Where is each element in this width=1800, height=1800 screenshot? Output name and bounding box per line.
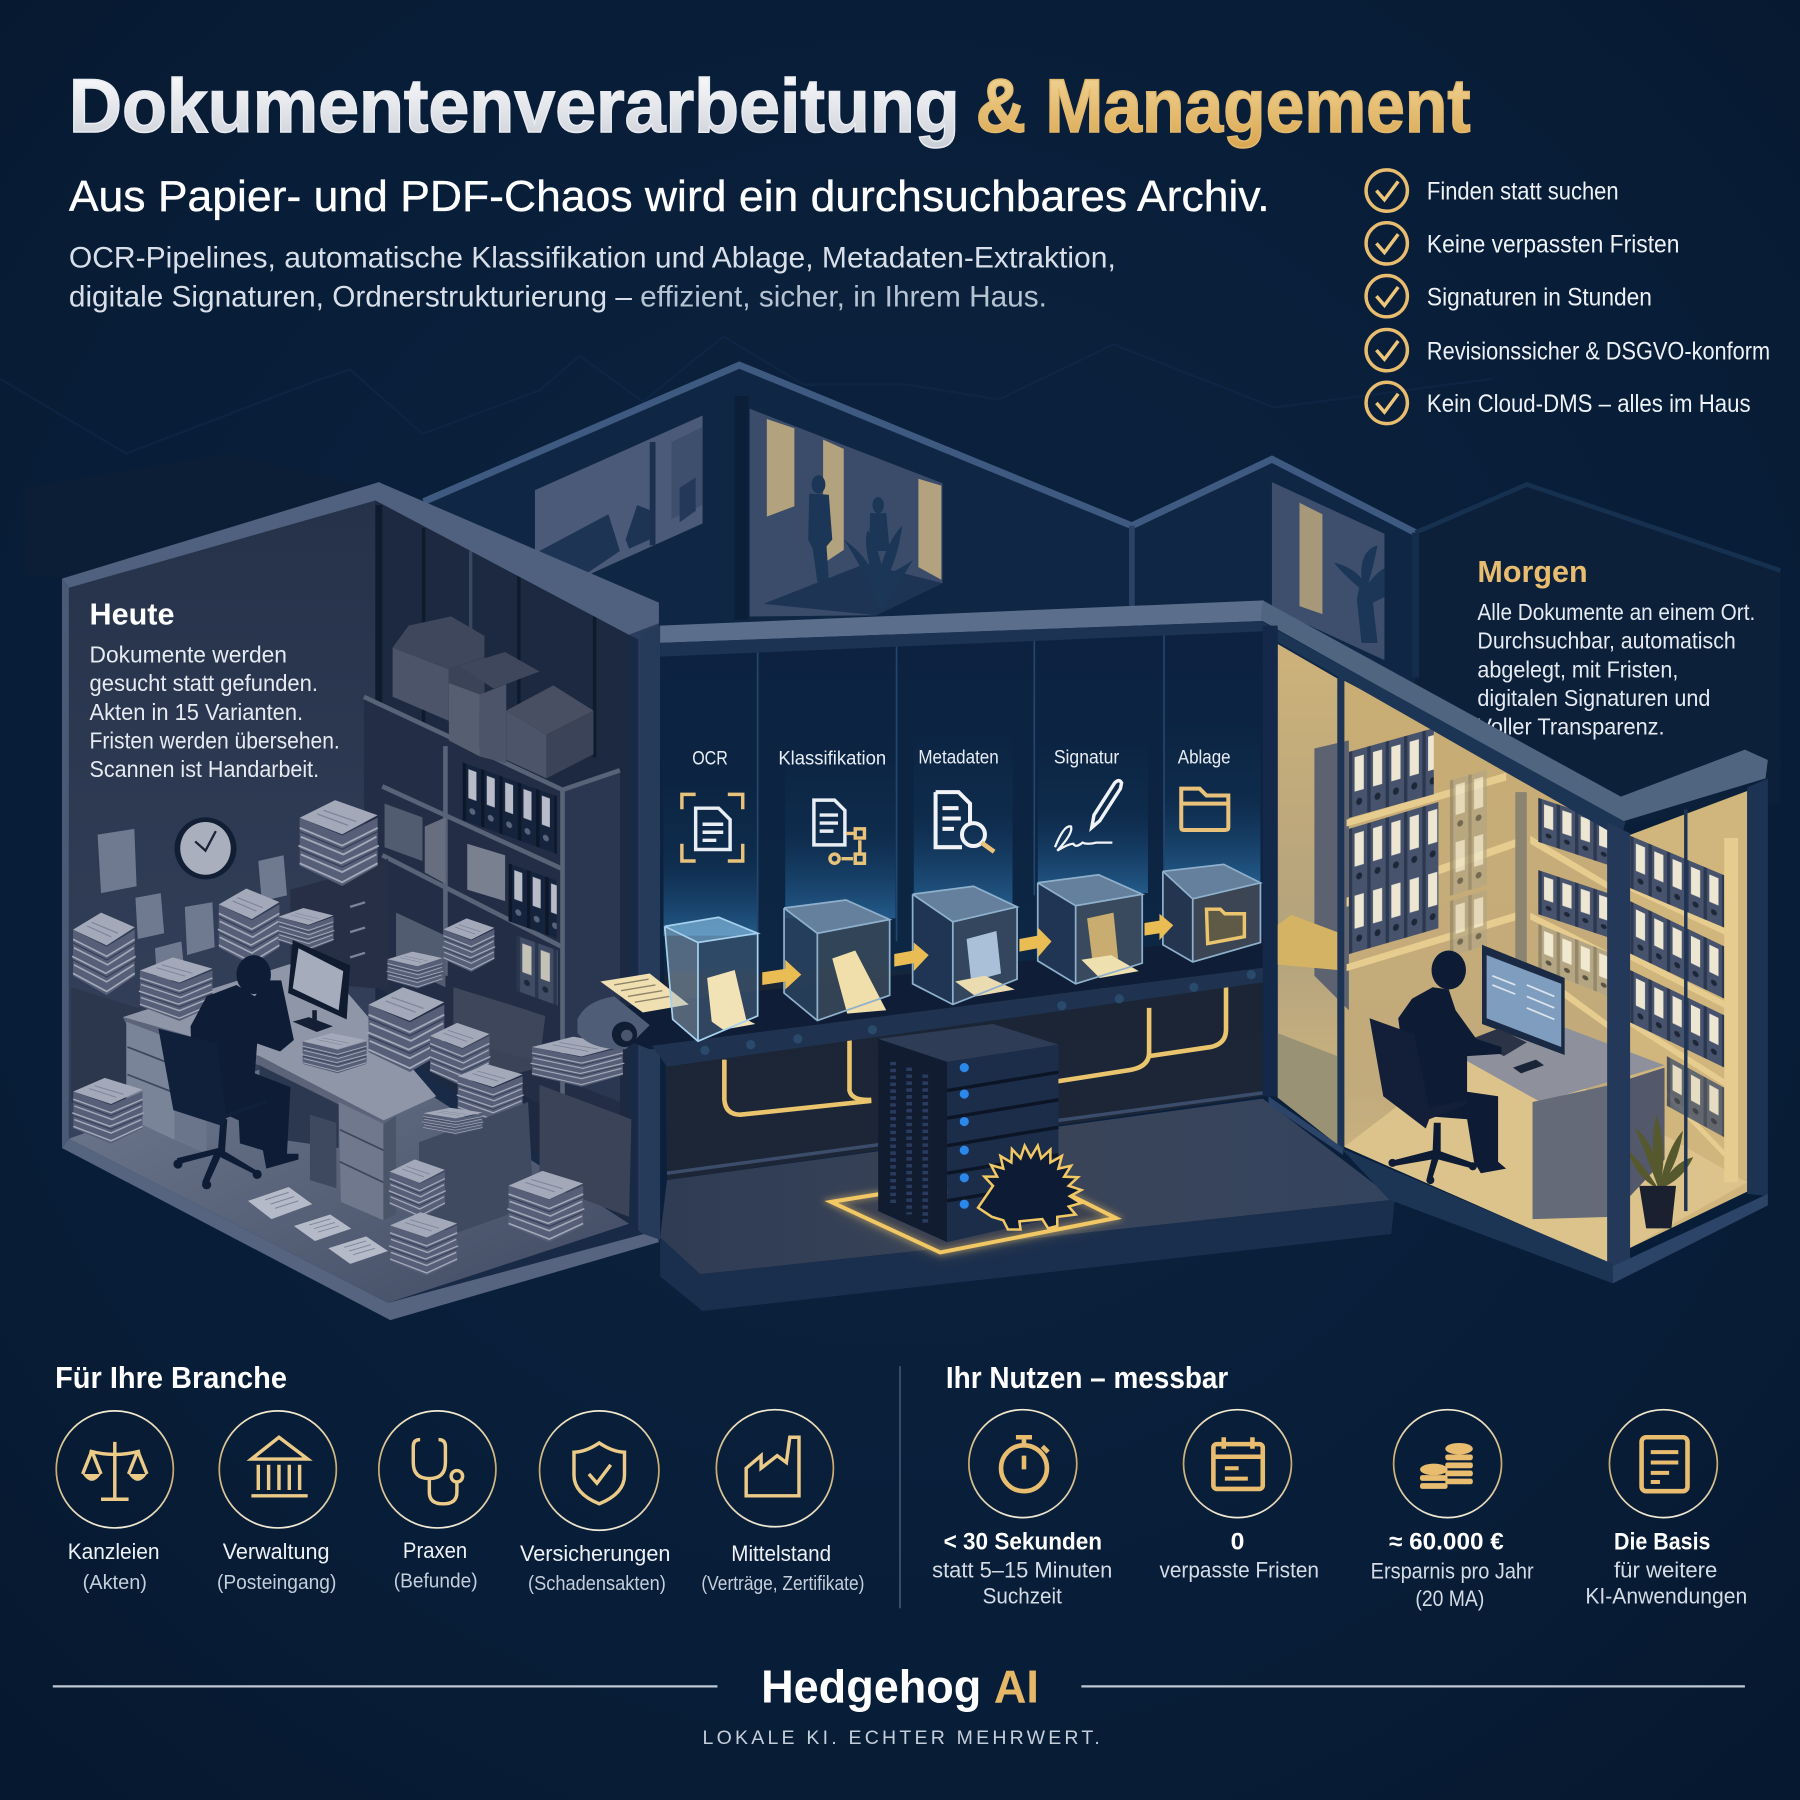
icon: folder: [1181, 789, 1228, 830]
icon: signature pen: [1055, 781, 1122, 851]
benefit: savings: (20 MA): [1415, 1586, 1484, 1611]
Heute text: Heute: [90, 596, 174, 631]
upper left window: [535, 416, 703, 580]
benefit: time: Suchzeit: [983, 1584, 1062, 1609]
floor: [660, 1099, 1395, 1274]
upper right window with plant: [1272, 482, 1384, 660]
wall bench: [71, 987, 149, 1119]
Heute text: [90, 596, 340, 782]
paper stacks: [72, 800, 631, 1276]
industry: Mittelstand: Mittelstand: [731, 1541, 831, 1566]
description: [69, 241, 1116, 314]
step labels: Ablage: [1178, 746, 1231, 768]
left room: Heute: [62, 482, 659, 1320]
yellow floor square: [831, 1192, 1116, 1252]
plant: [1628, 1115, 1693, 1228]
panel: Für Ihre Branche: Für Ihre Branche: [55, 1360, 287, 1395]
benefit checklist: Signaturen in Stunden: [1427, 283, 1652, 311]
benefit: savings: Ersparnis pro Jahr: [1371, 1558, 1534, 1583]
shelf with boxes and binders: [364, 616, 620, 1148]
middle room: pipeline: [577, 600, 1395, 1311]
incoming paper: [600, 973, 689, 1012]
benefit: foundation: KI-Anwendungen: [1585, 1584, 1747, 1609]
step labels: Klassifikation: [778, 748, 886, 770]
industry: Verwaltung: [217, 1411, 336, 1594]
Morgen text: Durchsuchbar, automatisch: [1477, 628, 1736, 654]
right room: Morgen: [1260, 600, 1768, 1283]
background skyline: [0, 336, 1492, 453]
industry: Versicherungen: [520, 1411, 670, 1595]
Morgen text: Morgen: [1477, 554, 1588, 589]
Morgen text: Voller Transparenz.: [1477, 714, 1665, 740]
benefit: foundation: Die Basis: [1614, 1529, 1710, 1556]
Morgen text: abgelegt, mit Fristen,: [1477, 656, 1678, 682]
file cabinet: [290, 859, 388, 990]
industry: Praxen: (Befunde): [394, 1570, 478, 1593]
benefit checklist: [1366, 170, 1770, 424]
icon: OCR: [682, 794, 743, 861]
benefit: deadlines: 0: [1231, 1529, 1244, 1556]
process box: classification: [784, 900, 890, 1021]
benefit: savings: [1371, 1410, 1534, 1611]
title: Dokumentenverarbeitung: [69, 64, 960, 149]
upper floor building: [23, 365, 1780, 827]
conveyor belt: [577, 932, 1326, 1066]
industry: Praxen: Praxen: [403, 1538, 467, 1563]
Heute text: Fristen werden übersehen.: [90, 727, 340, 753]
panel: Ihr Nutzen: [932, 1360, 1747, 1611]
Morgen text: [1477, 554, 1755, 740]
monitor: [288, 940, 350, 1032]
benefit: savings: ≈ 60.000 €: [1389, 1529, 1504, 1556]
title: & Management: [976, 64, 1471, 149]
loose sheets: [248, 1187, 388, 1264]
monitor: [1472, 945, 1565, 1073]
step labels: OCR: [692, 748, 728, 770]
icon: classification: [814, 800, 864, 863]
footer brand: [53, 1660, 1745, 1749]
desk: [1460, 1024, 1665, 1219]
boxes on shelf: [393, 616, 593, 778]
frame and mullions: [1260, 600, 1768, 1283]
upper centre window with silhouettes: [750, 409, 942, 616]
Heute text: gesucht statt gefunden.: [90, 670, 318, 696]
Morgen text: Alle Dokumente an einem Ort.: [1477, 599, 1755, 625]
title: [69, 64, 1471, 149]
desk: [123, 964, 436, 1220]
benefit: deadlines: [1159, 1410, 1319, 1582]
hedgehog logo: [978, 1146, 1081, 1229]
server rack: [878, 1024, 1058, 1242]
process box: metadata: [913, 886, 1017, 1004]
silhouette people: [808, 475, 913, 608]
benefit: foundation: [1585, 1410, 1747, 1609]
panel: Ihr Nutzen: Ihr Nutzen – messbar: [946, 1360, 1228, 1395]
Heute text: Scannen ist Handarbeit.: [90, 756, 319, 782]
data pipes: [724, 982, 1226, 1115]
benefit checklist: Keine verpassten Fristen: [1427, 231, 1679, 259]
process box: OCR: [665, 917, 758, 1041]
industry: Versicherungen: (Schadensakten): [528, 1572, 666, 1595]
industry: Praxen: [379, 1411, 496, 1593]
step labels: Metadaten: [918, 746, 999, 768]
Morgen text: digitalen Signaturen und: [1477, 685, 1710, 711]
process box: signature: [1038, 875, 1142, 984]
step labels: Signatur: [1054, 746, 1120, 768]
industry: Mittelstand: (Verträge, Zertifikate): [701, 1572, 864, 1595]
panel: Für Ihre Branche: [55, 1360, 864, 1595]
benefit checklist: Finden statt suchen: [1427, 178, 1619, 206]
benefit: time: statt 5–15 Minuten: [932, 1557, 1112, 1582]
icon: metadata search: [936, 792, 994, 852]
stressed worker silhouette: [158, 955, 298, 1189]
flow arrows: [762, 914, 1173, 990]
industry: Verwaltung: Verwaltung: [223, 1539, 329, 1564]
benefit: time: < 30 Sekunden: [944, 1529, 1102, 1556]
conveyor exit: [1263, 915, 1337, 970]
benefit: time: [932, 1410, 1112, 1609]
step labels: [692, 746, 1231, 770]
industry: Mittelstand: [701, 1410, 864, 1595]
industry: Kanzleien: [56, 1411, 173, 1594]
worker silhouette: [1370, 951, 1506, 1184]
glow columns: [664, 712, 1260, 936]
industry: Kanzleien: (Akten): [83, 1571, 147, 1594]
description: digitale Signaturen, Ordnerstrukturierung – effizient, sicher, in Ihrem Haus.: [69, 281, 1047, 314]
glass walls: [1278, 644, 1747, 1264]
pinned notes: [98, 829, 287, 985]
industry: Verwaltung: (Posteingang): [217, 1571, 336, 1594]
process box: filing: [1163, 864, 1260, 962]
industry: Versicherungen: Versicherungen: [520, 1541, 670, 1566]
room shell: [62, 482, 659, 1320]
benefit: deadlines: verpasste Fristen: [1159, 1557, 1319, 1582]
subtitle: Aus Papier- und PDF-Chaos wird ein durchsuchbares Archiv.: [69, 173, 1270, 221]
description: OCR-Pipelines, automatische Klassifikation und Ablage, Metadaten-Extraktion,: [69, 241, 1116, 274]
industry: Kanzleien: Kanzleien: [68, 1539, 160, 1564]
footer brand: LOKALE KI. ECHTER MEHRWERT.: [703, 1727, 1100, 1749]
Heute text: Akten in 15 Varianten.: [90, 699, 303, 725]
wall clock: [174, 817, 236, 879]
binder shelves: [1314, 728, 1738, 1182]
roof rim: [660, 600, 1264, 643]
footer brand: Hedgehog AI: [761, 1660, 1039, 1712]
benefit checklist: Kein Cloud-DMS – alles im Haus: [1427, 390, 1751, 418]
back wall: [660, 618, 1263, 1180]
benefit: foundation: für weitere: [1614, 1557, 1717, 1582]
Heute text: Dokumente werden: [90, 641, 287, 667]
